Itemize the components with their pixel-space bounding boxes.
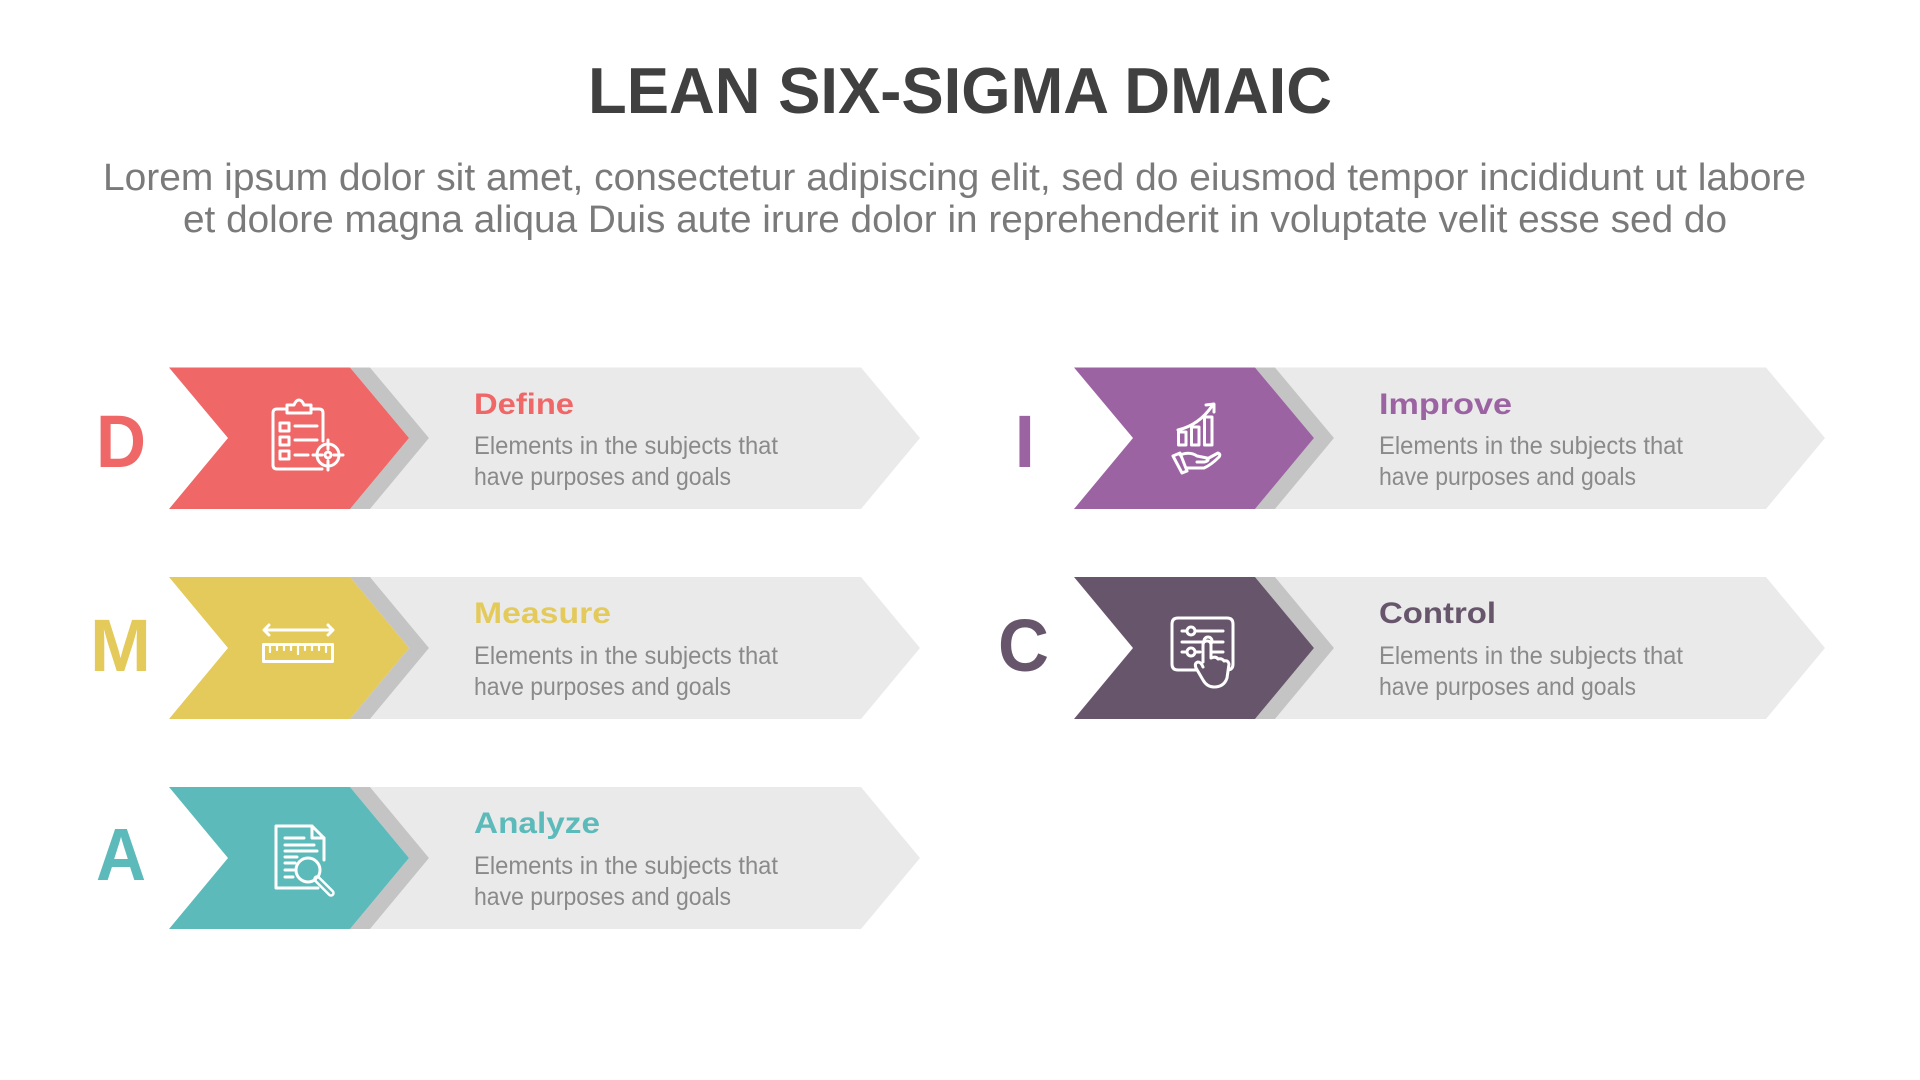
description: Elements in the subjects that bbox=[1379, 432, 1683, 460]
description: have purposes and goals bbox=[474, 463, 731, 491]
letter I: I bbox=[1014, 400, 1035, 483]
subtitle text: Lorem ipsum dolor sit amet, consectetur adipiscing elit, sed do eiusmod tempor incididunt ut labore bbox=[103, 157, 1806, 199]
panel: Improve bbox=[1014, 368, 1825, 509]
description: have purposes and goals bbox=[1379, 463, 1636, 491]
grey arrow body bbox=[1275, 368, 1825, 509]
dark chevron bbox=[1074, 577, 1314, 719]
heading: Improve bbox=[1379, 388, 1512, 421]
chevron shadow bbox=[350, 577, 429, 719]
description: have purposes and goals bbox=[474, 673, 731, 701]
letter D: D bbox=[96, 400, 146, 483]
coral chevron bbox=[169, 368, 409, 509]
title: LEAN SIX-SIGMA DMAIC bbox=[588, 54, 1332, 127]
heading: Analyze bbox=[474, 807, 600, 840]
description: Elements in the subjects that bbox=[474, 642, 778, 670]
subtitle text bbox=[103, 157, 1806, 241]
grey arrow body bbox=[370, 787, 920, 929]
letter A: A bbox=[96, 813, 146, 896]
description bbox=[474, 852, 778, 911]
heading: Measure bbox=[474, 597, 611, 630]
chevron shadow bbox=[350, 368, 429, 509]
description: Elements in the subjects that bbox=[1379, 642, 1683, 670]
subtitle text: et dolore magna aliqua Duis aute irure dolor in reprehenderit in voluptate velit esse sed do bbox=[183, 199, 1727, 241]
description bbox=[474, 642, 778, 701]
description bbox=[1379, 432, 1683, 491]
purple chevron bbox=[1074, 368, 1314, 509]
description bbox=[474, 432, 778, 491]
icon: clipboard with target bbox=[273, 400, 343, 470]
teal chevron bbox=[169, 787, 409, 929]
panel: Define bbox=[96, 368, 920, 509]
description: have purposes and goals bbox=[1379, 673, 1636, 701]
panel: Control bbox=[998, 577, 1825, 719]
letter M: M bbox=[90, 604, 151, 687]
grey arrow body bbox=[370, 368, 920, 509]
chevron shadow bbox=[350, 787, 429, 929]
chevron shadow bbox=[1255, 577, 1334, 719]
icon: control panel with hand bbox=[1172, 618, 1233, 687]
heading: Control bbox=[1379, 597, 1496, 630]
description: have purposes and goals bbox=[474, 883, 731, 911]
icon: ruler bbox=[264, 625, 333, 662]
description bbox=[1379, 642, 1683, 701]
icon: growth chart on hand bbox=[1173, 404, 1220, 473]
panel: Analyze bbox=[96, 787, 920, 929]
description: Elements in the subjects that bbox=[474, 852, 778, 880]
chevron shadow bbox=[1255, 368, 1334, 509]
grey arrow body bbox=[370, 577, 920, 719]
icon: document with magnifier bbox=[276, 826, 331, 893]
heading: Define bbox=[474, 388, 574, 421]
letter C: C bbox=[998, 604, 1049, 687]
yellow chevron bbox=[169, 577, 409, 719]
description: Elements in the subjects that bbox=[474, 432, 778, 460]
panel: Measure bbox=[90, 577, 920, 719]
grey arrow body bbox=[1275, 577, 1825, 719]
